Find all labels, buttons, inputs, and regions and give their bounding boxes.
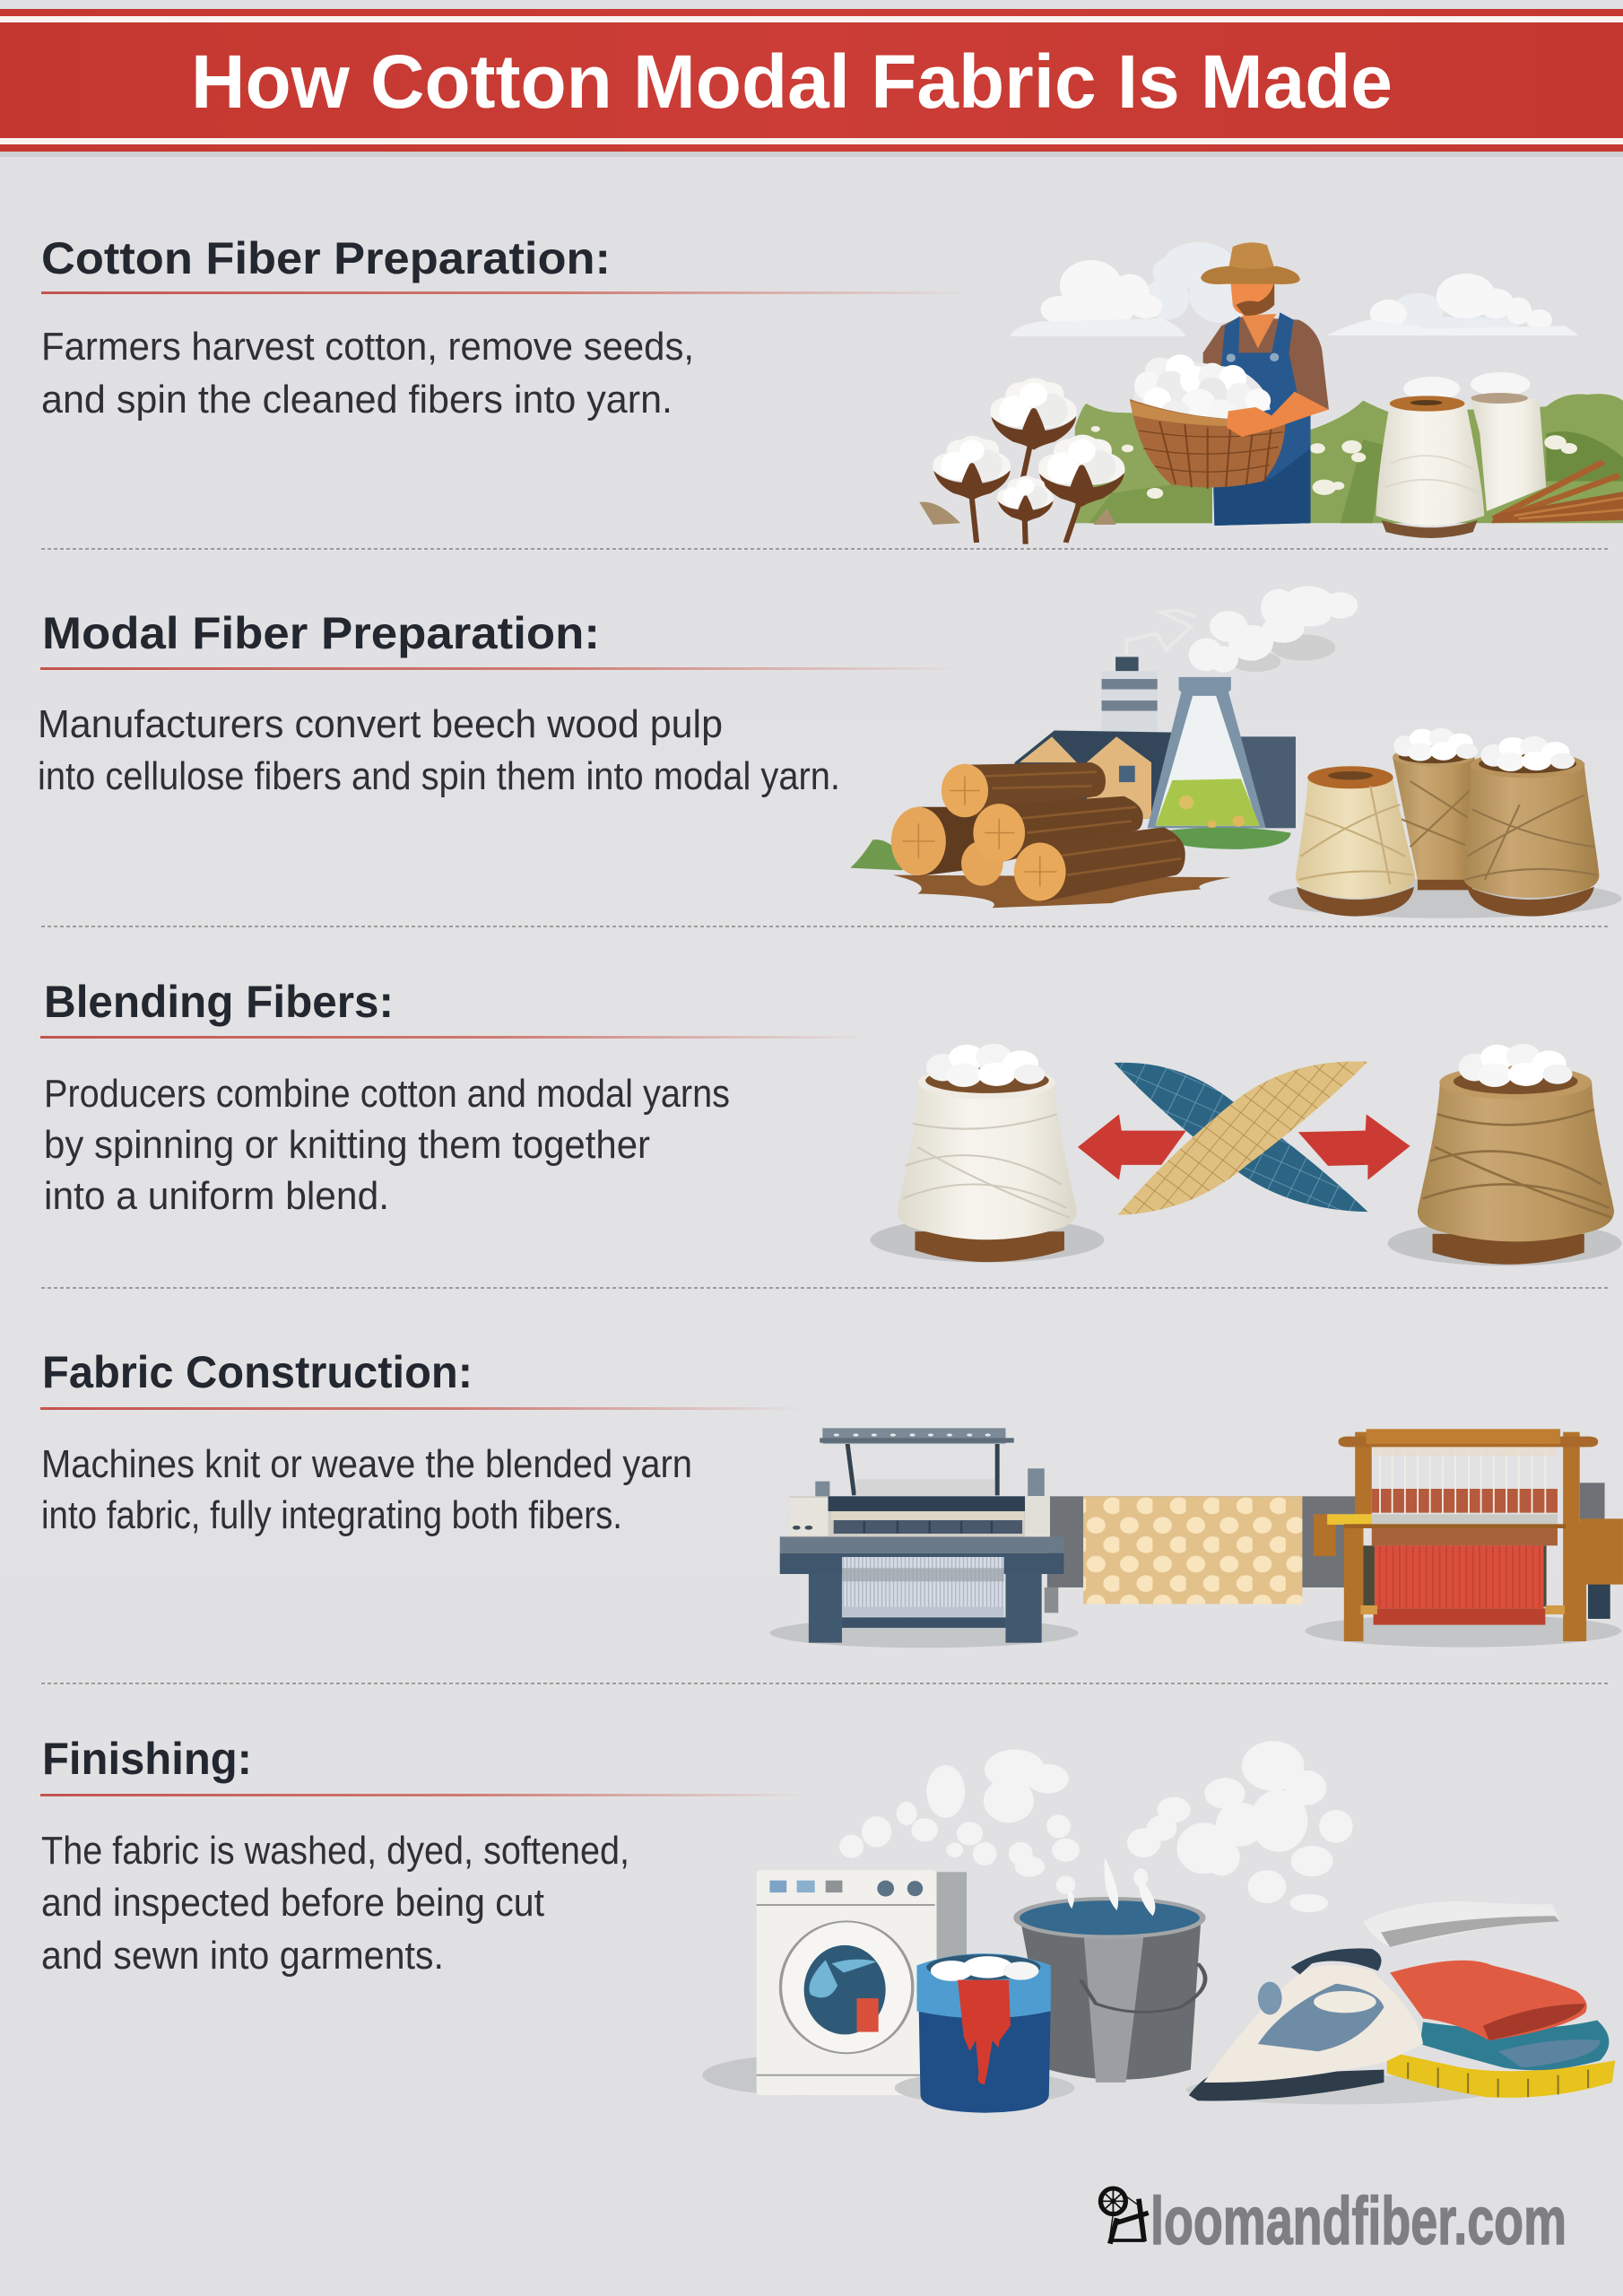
panel: cotton fiber preparation <box>41 233 1623 544</box>
divider 4 <box>41 1683 1610 1684</box>
title text: How Cotton Modal Fabric Is Made <box>191 39 1393 124</box>
heading: Finishing: <box>42 1734 252 1784</box>
panel: fabric construction: into fabric, fully integrating both fibers. <box>41 1493 622 1537</box>
panel: modal fiber preparation <box>38 586 1621 918</box>
divider 2 <box>41 926 1610 927</box>
divider 3 <box>41 1287 1610 1289</box>
iron <box>1189 1948 1423 2100</box>
illustration: logs, factory, flask and yarn cones <box>850 586 1621 918</box>
illustration: washer, dye, bucket, iron and clothes <box>702 1741 1615 2113</box>
panel: fabric construction <box>40 1347 1623 1648</box>
body text: Farmers harvest cotton, remove seeds, <box>41 325 694 369</box>
panel: blending fibers: into a uniform blend. <box>44 1174 389 1218</box>
dye bucket <box>895 1953 1075 2113</box>
logo <box>1100 2183 1567 2258</box>
panel: finishing: and inspected before being cut <box>41 1881 544 1925</box>
heading: Cotton Fiber Preparation: <box>41 233 611 283</box>
body text: Manufacturers convert beech wood pulp <box>38 702 723 746</box>
arrow: left <box>1078 1114 1186 1180</box>
body text: Machines knit or weave the blended yarn <box>41 1442 692 1486</box>
heading: Modal Fiber Preparation: <box>42 608 600 658</box>
icon: spinning wheel <box>1100 2188 1149 2244</box>
heading: Fabric Construction: <box>42 1347 473 1397</box>
title banner <box>0 9 1623 157</box>
panel: modal fiber preparation: into cellulose fibers and spin them into modal yarn. <box>38 754 840 798</box>
body text: The fabric is washed, dyed, softened, <box>41 1829 629 1873</box>
illustration: yarn cones blending <box>871 1044 1621 1265</box>
illustration: knitting machine, fabric and loom <box>770 1428 1623 1648</box>
panel: blending fibers: by spinning or knitting them together <box>44 1123 650 1167</box>
panel: finishing <box>40 1734 1615 2113</box>
steam <box>839 1741 1353 1912</box>
panel: cotton fiber preparation: and spin the cleaned fibers into yarn. <box>41 378 673 422</box>
illustration: farmer, cotton and yarn <box>919 242 1623 544</box>
gray bucket <box>1017 1857 1205 2083</box>
washing machine <box>757 1870 967 2095</box>
fabric swatch <box>1083 1496 1302 1604</box>
arrow: right <box>1298 1114 1410 1180</box>
panel: finishing: and sewn into garments. <box>41 1934 444 1978</box>
heading: Blending Fibers: <box>44 977 394 1027</box>
panel: blending fibers <box>40 977 1621 1265</box>
folded clothes and tape <box>1387 1961 1615 2098</box>
divider 1 <box>41 548 1610 550</box>
body text: Producers combine cotton and modal yarns <box>44 1072 730 1116</box>
